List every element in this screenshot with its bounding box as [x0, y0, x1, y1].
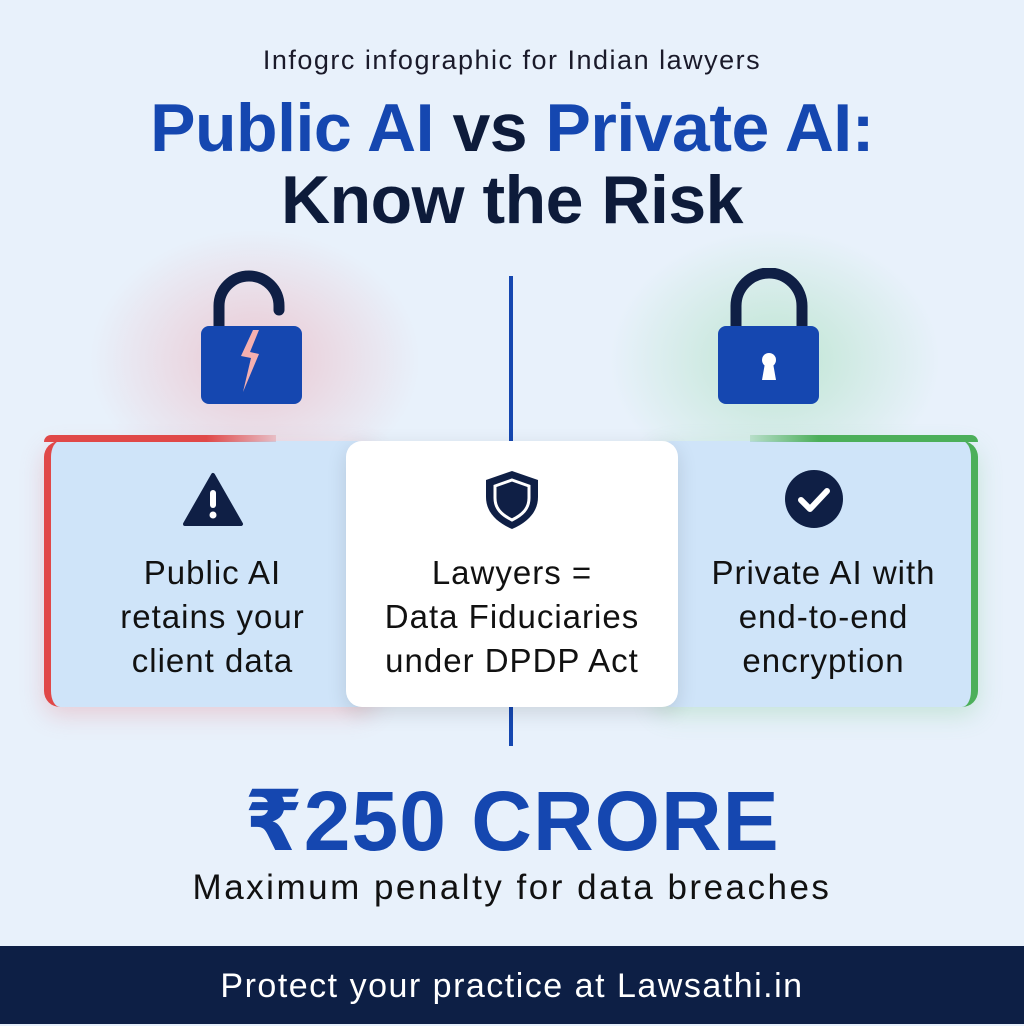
panel: lawyers center: under DPDP Act [385, 642, 639, 679]
penalty caption: Maximum penalty for data breaches [193, 868, 831, 907]
panel: lawyers center: Lawyers = [432, 554, 592, 591]
panel: public AI: client data [132, 642, 293, 679]
background glows [90, 230, 420, 490]
panel: public AI: retains your [120, 598, 305, 635]
panel: private AI: end-to-end [739, 598, 908, 635]
icon: warning [183, 472, 244, 526]
panel: private AI [656, 441, 978, 707]
icon: shield [486, 471, 538, 529]
title: Public AI vs Private AI: [150, 90, 874, 166]
subtitle: Infogrc infographic for Indian lawyers [263, 45, 761, 75]
icon: closed lock [718, 268, 819, 404]
panel: public AI: Public AI [144, 554, 281, 591]
title [150, 90, 874, 238]
panel: lawyers center: Data Fiduciaries [385, 598, 639, 635]
title: Know the Risk [281, 162, 743, 238]
green top accent [750, 435, 978, 442]
panel: private AI: Private AI with [711, 554, 936, 591]
panel: public AI [44, 441, 374, 707]
red top accent [44, 435, 276, 442]
panel: private AI: encryption [742, 642, 905, 679]
footer: Protect your practice at Lawsathi.in [220, 967, 804, 1005]
panel: lawyers center [346, 441, 678, 707]
icon: check [785, 470, 843, 528]
penalty amount: ₹250 CRORE [244, 774, 780, 868]
divider line [509, 276, 513, 746]
footer [0, 946, 1024, 1024]
icon: broken lock [201, 270, 302, 404]
